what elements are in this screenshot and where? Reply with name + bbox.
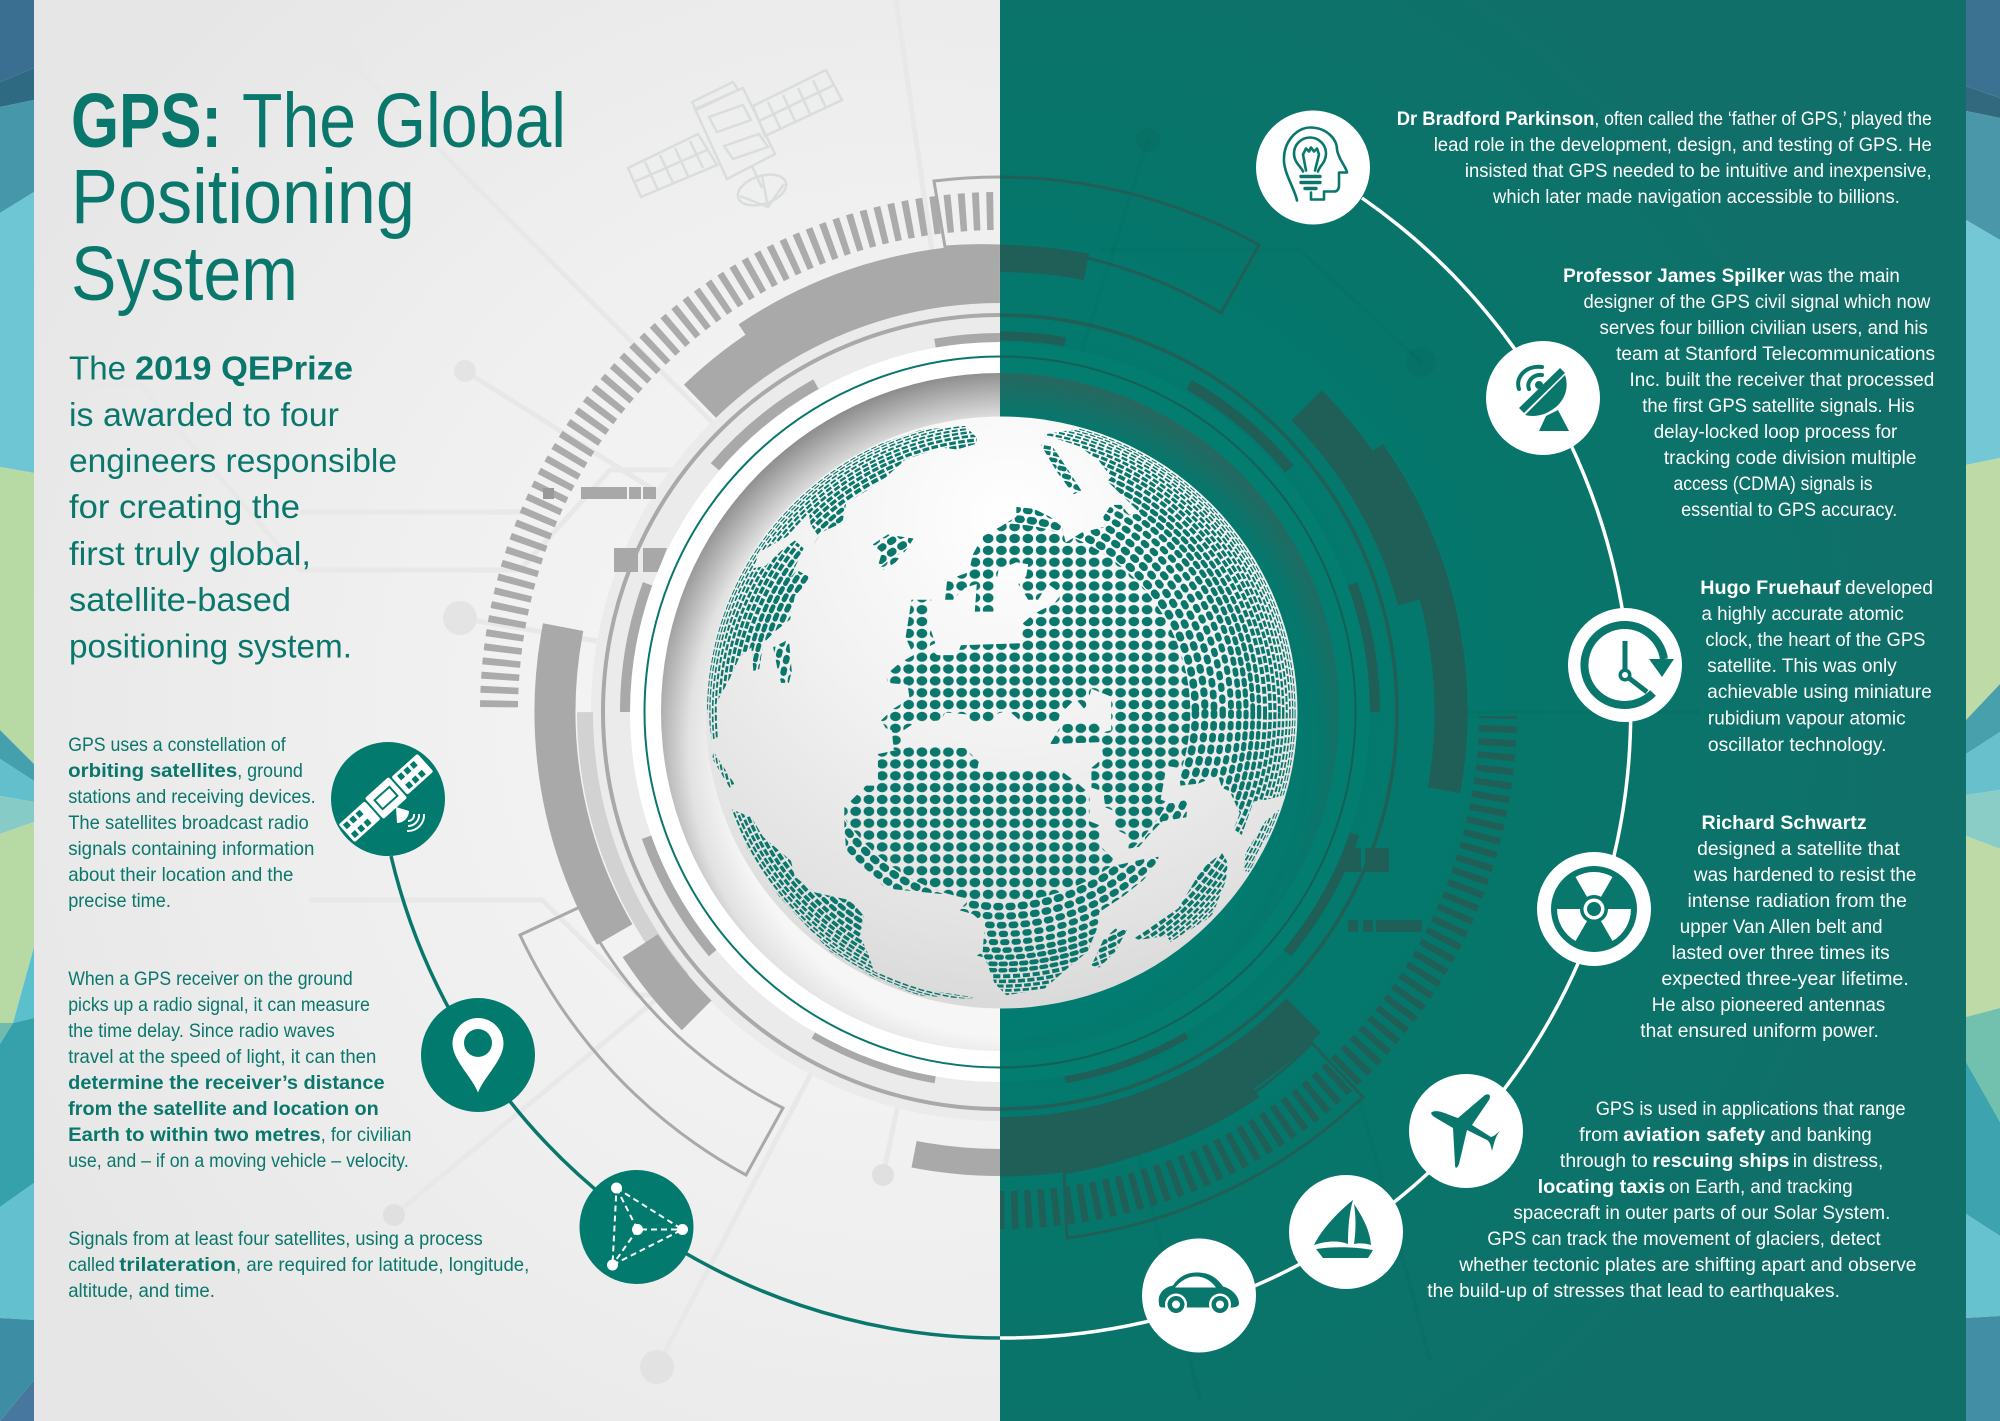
- text: applications of GPS: and banking: [1770, 1124, 1872, 1146]
- text: 2019 QEPrize intro: first truly global,: [69, 535, 311, 572]
- icon: head with light bulb: [1256, 110, 1370, 224]
- text: trilateration: [68, 1228, 529, 1302]
- panel: left light background: [34, 0, 1000, 1421]
- text: applications of GPS: GPS can track the movement of glaciers, detect: [1487, 1228, 1881, 1250]
- text: applications of GPS: locating taxis: [1538, 1176, 1665, 1198]
- icon: trilateration triangle: [580, 1170, 694, 1284]
- arc: white connector, right half: [1000, 198, 1631, 1338]
- icon: background satellite outline: [628, 70, 842, 211]
- text: applications of GPS: through to: [1560, 1150, 1648, 1172]
- title: [71, 78, 566, 317]
- title: The Global: [242, 78, 566, 164]
- text: Professor James Spilker: designer of the GPS civil signal which now: [1584, 291, 1931, 313]
- text: applications of GPS: from: [1579, 1124, 1619, 1146]
- text: Richard Schwartz: designed a satellite that: [1697, 838, 1900, 860]
- title: Positioning: [71, 154, 415, 240]
- text: Professor James Spilker: team at Stanford Telecommunications: [1616, 343, 1935, 365]
- text: Professor James Spilker: serves four billion civilian users, and his: [1600, 317, 1928, 339]
- text: receiver distance: travel at the speed of light, it can then: [68, 1046, 376, 1068]
- text: Hugo Fruehauf: [1700, 577, 1933, 756]
- text: 2019 QEPrize intro: positioning system.: [69, 628, 352, 664]
- text: Hugo Fruehauf: Hugo Fruehauf: [1700, 577, 1841, 599]
- text: Hugo Fruehauf: achievable using miniature: [1707, 681, 1932, 703]
- text: orbiting satellites: GPS uses a constellation of: [68, 734, 286, 756]
- text: Richard Schwartz: lasted over three times its: [1672, 942, 1890, 964]
- text: Richard Schwartz: expected three-year lifetime.: [1661, 968, 1909, 990]
- text: Richard Schwartz: intense radiation from the: [1688, 890, 1907, 912]
- text: 2019 QEPrize intro: for creating the: [69, 488, 300, 525]
- text: Dr Bradford Parkinson: , often called the ‘father of GPS,’ played the: [1594, 108, 1932, 130]
- panel: right polygon strip: [1966, 0, 2000, 1421]
- text: orbiting satellites: precise time.: [68, 890, 171, 912]
- text: Professor James Spilker: Professor James Spilker: [1563, 265, 1785, 287]
- chart: teal inner ring, right half: [1000, 351, 1370, 1076]
- arc: teal connector, left half: [391, 856, 1000, 1338]
- text: Richard Schwartz: that ensured uniform power.: [1640, 1020, 1879, 1042]
- icon: orbiting satellite: [331, 742, 445, 856]
- text: Hugo Fruehauf: developed: [1845, 577, 1933, 599]
- text: Professor James Spilker: Inc. built the receiver that processed: [1630, 369, 1934, 391]
- text: Professor James Spilker: [1563, 265, 1935, 521]
- text: Richard Schwartz: Richard Schwartz: [1702, 812, 1867, 834]
- text: trilateration: called: [68, 1254, 115, 1276]
- text: applications of GPS: the build-up of stresses that lead to earthquakes.: [1427, 1280, 1840, 1302]
- text: orbiting satellites: signals containing information: [68, 838, 314, 860]
- text: trilateration: altitude, and time.: [68, 1280, 215, 1302]
- text: Richard Schwartz: was hardened to resist the: [1693, 864, 1916, 886]
- globe: dotted sphere: [706, 416, 1298, 1008]
- chart: concentric rings, right teal half: [1000, 176, 1517, 1240]
- text: receiver distance: [68, 968, 411, 1172]
- text: 2019 QEPrize intro: [69, 350, 397, 664]
- text: Professor James Spilker: delay-locked loop process for: [1654, 421, 1898, 443]
- panel: left polygon strip: [0, 0, 34, 1421]
- text: 2019 QEPrize intro: satellite-based: [69, 581, 291, 618]
- text: applications of GPS: aviation safety: [1623, 1124, 1765, 1146]
- text: orbiting satellites: stations and receiving devices.: [68, 786, 316, 808]
- text: receiver distance: use, and – if on a moving vehicle – velocity.: [68, 1150, 409, 1172]
- text: Dr Bradford Parkinson: Dr Bradford Parkinson: [1397, 108, 1594, 130]
- text: Hugo Fruehauf: oscillator technology.: [1708, 734, 1886, 756]
- text: orbiting satellites: The satellites broadcast radio: [68, 812, 309, 834]
- text: receiver distance: picks up a radio signal, it can measure: [68, 994, 370, 1016]
- text: Dr Bradford Parkinson: [1397, 108, 1932, 208]
- chart: concentric rings, left grey half: [480, 176, 1000, 1177]
- text: orbiting satellites: , ground: [237, 760, 303, 782]
- text: 2019 QEPrize intro: The: [69, 350, 126, 386]
- icon: atomic clock: [1568, 608, 1682, 722]
- text: receiver distance: determine the receiver’s distance: [68, 1072, 385, 1094]
- title: System: [71, 231, 298, 317]
- icon: location pin: [421, 998, 535, 1112]
- text: receiver distance: , for civilian: [321, 1124, 411, 1146]
- panel: right teal background: [1000, 0, 1966, 1421]
- title: GPS:: [71, 78, 222, 164]
- text: Hugo Fruehauf: satellite. This was only: [1707, 655, 1897, 677]
- text: Professor James Spilker: essential to GPS accuracy.: [1681, 499, 1897, 521]
- icon: sailing boat: [1289, 1175, 1403, 1289]
- icon: satellite dish: [1486, 341, 1600, 455]
- text: orbiting satellites: orbiting satellites: [68, 760, 237, 782]
- chart: white inner ring, left half: [630, 342, 1000, 1082]
- text: orbiting satellites: [68, 734, 316, 912]
- text: Richard Schwartz: He also pioneered antennas: [1652, 994, 1885, 1016]
- text: 2019 QEPrize intro: 2019 QEPrize: [135, 350, 353, 386]
- text: applications of GPS: in distress,: [1793, 1150, 1883, 1172]
- text: applications of GPS: whether tectonic plates are shifting apart and observe: [1458, 1254, 1916, 1276]
- text: trilateration: trilateration: [119, 1254, 236, 1276]
- text: applications of GPS: on Earth, and tracking: [1669, 1176, 1853, 1198]
- text: Dr Bradford Parkinson: insisted that GPS needed to be intuitive and inexpensive,: [1465, 160, 1932, 182]
- icon: radiation symbol: [1537, 852, 1651, 966]
- text: applications of GPS: rescuing ships: [1652, 1150, 1790, 1172]
- text: Hugo Fruehauf: rubidium vapour atomic: [1708, 708, 1906, 730]
- text: Professor James Spilker: was the main: [1789, 265, 1900, 287]
- text: Hugo Fruehauf: clock, the heart of the GPS: [1705, 629, 1925, 651]
- text: trilateration: , are required for latitude, longitude,: [236, 1254, 529, 1276]
- text: receiver distance: the time delay. Since radio waves: [68, 1020, 335, 1042]
- text: Dr Bradford Parkinson: which later made navigation accessible to billions.: [1492, 186, 1900, 208]
- text: Richard Schwartz: [1640, 812, 1916, 1042]
- text: applications of GPS: spacecraft in outer parts of our Solar System.: [1513, 1202, 1890, 1224]
- text: Professor James Spilker: tracking code division multiple: [1664, 447, 1916, 469]
- text: receiver distance: from the satellite and location on: [68, 1098, 379, 1120]
- text: 2019 QEPrize intro: engineers responsible: [69, 442, 397, 479]
- text: 2019 QEPrize intro: is awarded to four: [69, 396, 339, 433]
- text: Professor James Spilker: access (CDMA) signals is: [1674, 473, 1873, 495]
- icon: car: [1142, 1238, 1256, 1352]
- text: receiver distance: Earth to within two metres: [68, 1124, 321, 1146]
- text: receiver distance: When a GPS receiver on the ground: [68, 968, 353, 990]
- text: Richard Schwartz: upper Van Allen belt and: [1680, 916, 1883, 938]
- text: Professor James Spilker: the first GPS satellite signals. His: [1642, 395, 1915, 417]
- text: Hugo Fruehauf: a highly accurate atomic: [1702, 603, 1904, 625]
- text: applications of GPS: [1427, 1098, 1916, 1302]
- text: orbiting satellites: about their location and the: [68, 864, 293, 886]
- text: trilateration: Signals from at least four satellites, using a process: [68, 1228, 483, 1250]
- icon: aeroplane: [1409, 1074, 1523, 1188]
- text: applications of GPS: GPS is used in applications that range: [1596, 1098, 1906, 1120]
- text: Dr Bradford Parkinson: lead role in the development, design, and testing of GPS. He: [1434, 134, 1932, 156]
